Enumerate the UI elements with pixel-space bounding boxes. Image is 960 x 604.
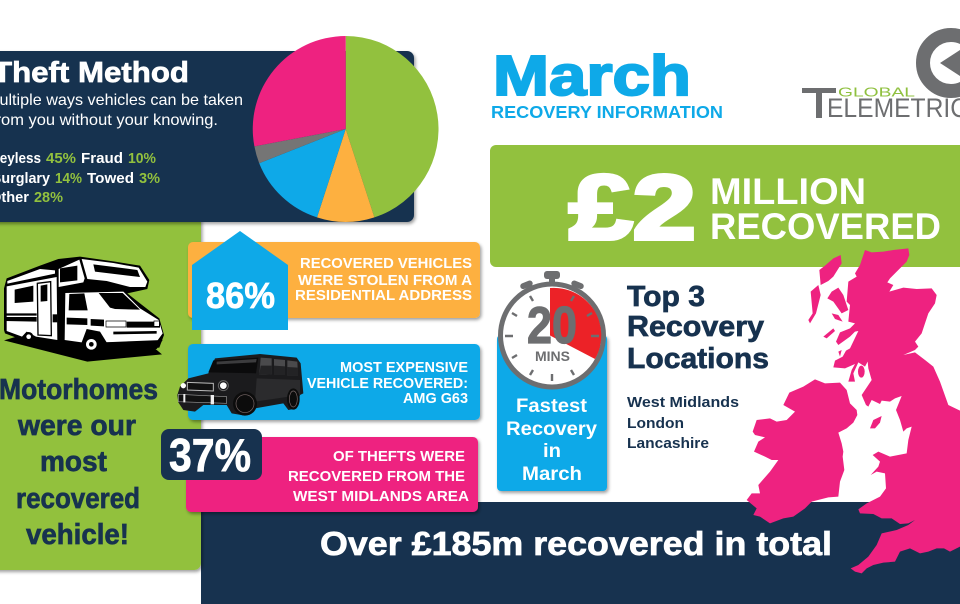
icon: black SUV	[177, 354, 303, 416]
legend: theft percentages	[0, 151, 160, 206]
text: fastest recovery in March: Fastest	[516, 396, 588, 417]
logo: Global Telemetrics: GLOBAL	[838, 86, 915, 100]
text: motorhomes headline: were our	[17, 410, 136, 442]
text: most expensive vehicle	[307, 359, 468, 407]
panel: £2 million recovered: RECOVERED	[710, 206, 941, 247]
text: most expensive vehicle: VEHICLE RECOVERED:	[307, 375, 468, 392]
text: motorhomes headline: Motorhomes	[0, 374, 158, 406]
text: motorhomes headline: most	[40, 446, 107, 478]
text: description	[0, 92, 243, 129]
legend: theft percentages: 10%	[128, 151, 156, 167]
text: west midlands	[288, 448, 469, 505]
title: March: March	[493, 44, 691, 108]
list: recovery locations: West Midlands	[627, 395, 739, 411]
list: recovery locations	[627, 395, 739, 452]
icon: stopwatch: MINS	[535, 348, 570, 364]
text: west midlands: RECOVERED FROM THE	[288, 468, 465, 485]
text: fastest recovery in March: Recovery	[506, 419, 597, 440]
icon: stopwatch	[500, 271, 604, 387]
text: west midlands: OF THEFTS WERE	[333, 448, 465, 465]
panel: motorhomes	[0, 215, 201, 570]
icon: house with 86%	[192, 231, 288, 330]
text: motorhomes headline	[0, 374, 158, 551]
text: west midlands: WEST MIDLANDS AREA	[293, 488, 469, 505]
text: residential address: RECOVERED VEHICLES	[300, 255, 472, 272]
icon: motorhome	[4, 257, 164, 362]
legend: theft percentages: 14%	[55, 171, 82, 187]
text: motorhomes headline: vehicle!	[26, 519, 129, 551]
bottom band: total recovered	[201, 502, 960, 604]
text: motorhomes headline: recovered	[16, 483, 140, 515]
heading: top 3 recovery locations: Top 3	[627, 281, 705, 313]
text: fastest recovery in March: March	[522, 464, 582, 485]
legend: theft percentages: Towed	[87, 171, 134, 187]
text: residential address	[295, 255, 472, 304]
text: most expensive vehicle: MOST EXPENSIVE	[340, 359, 468, 376]
panel: west midlands stat	[161, 429, 478, 512]
heading: top 3 recovery locations: Locations	[627, 343, 769, 375]
legend: theft percentages: 28%	[34, 190, 63, 206]
map: UK and Ireland	[747, 248, 960, 573]
legend: theft percentages: Fraud	[81, 151, 123, 167]
list: recovery locations: Lancashire	[627, 436, 709, 452]
logo: Global Telemetrics	[802, 35, 960, 123]
bottom band: total recovered: Over £185m recovered in total	[320, 525, 832, 562]
badge: 37%: 37%	[169, 429, 251, 481]
panel: £2 million recovered: MILLION	[710, 171, 866, 212]
legend: theft percentages: 45%	[46, 151, 76, 167]
pie chart: theft method	[253, 36, 439, 222]
list: recovery locations: London	[627, 416, 684, 432]
text: fastest recovery in March	[506, 396, 597, 485]
text: residential address: RESIDENTIAL ADDRESS	[295, 287, 472, 304]
panel: theft method	[0, 36, 439, 222]
text: residential address: WERE STOLEN FROM A	[298, 272, 472, 289]
text: most expensive vehicle: AMG G63	[403, 390, 468, 407]
panel: £2 million recovered	[490, 145, 960, 267]
subtitle: recovery information: RECOVERY INFORMATION	[491, 102, 723, 122]
panel: fastest recovery	[497, 271, 607, 491]
legend: theft percentages: 3%	[139, 171, 160, 187]
panel: £2 million recovered: £2	[569, 157, 696, 259]
icon: house with 86%: 86%	[206, 275, 275, 316]
panel: residential address stat	[188, 231, 480, 330]
panel: most expensive vehicle	[177, 344, 480, 420]
icon: stopwatch: 20	[527, 297, 577, 355]
heading: top 3 recovery locations	[627, 281, 769, 375]
heading: top 3 recovery locations: Recovery	[627, 311, 764, 343]
text: fastest recovery in March: in	[543, 441, 561, 462]
